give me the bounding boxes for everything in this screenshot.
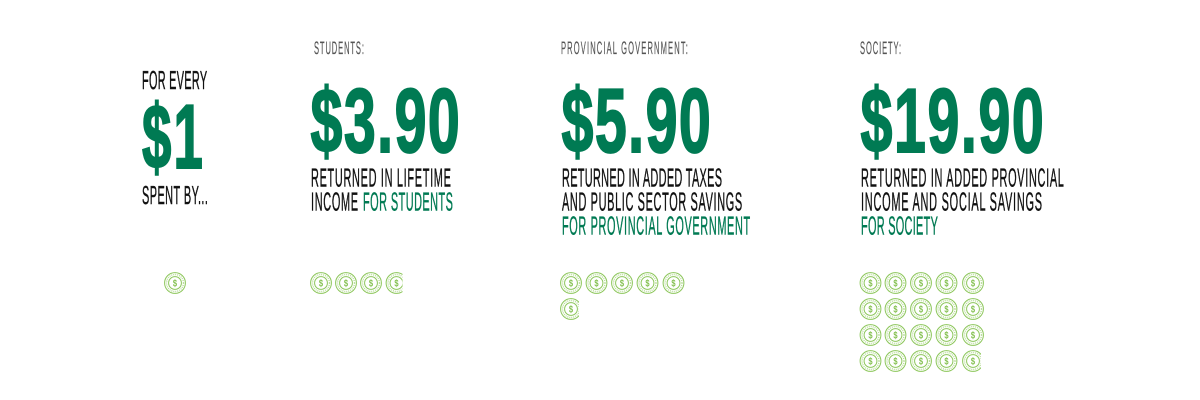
icon row: 3.9 coins	[311, 273, 407, 293]
description: society: INCOME AND SOCIAL SAVINGS	[861, 186, 1042, 216]
icon grid: 19.9 coins: $	[893, 330, 898, 342]
text: for every: FOR EVERY	[142, 65, 207, 95]
icon grid: 19.9 coins: $	[919, 304, 923, 316]
icon grid: 19.9 coins: $	[893, 304, 898, 316]
icon grid: 19.9 coins: $	[944, 356, 949, 368]
icon: single coin	[165, 273, 185, 293]
icon: single coin: $	[173, 278, 177, 290]
icon rows: 5.9 coins: $	[594, 278, 599, 290]
icon grid: 19.9 coins: $	[868, 304, 873, 316]
icon grid: 19.9 coins: $	[868, 356, 873, 368]
icon grid: 19.9 coins: $	[944, 278, 949, 290]
icon rows: 5.9 coins	[561, 273, 684, 319]
icon grid: 19.9 coins: $	[893, 356, 898, 368]
label: provincial government: PROVINCIAL GOVERNMENT:	[561, 38, 688, 58]
icon grid: 19.9 coins: $	[919, 356, 923, 368]
icon grid: 19.9 coins: $	[919, 278, 923, 290]
icon rows: 5.9 coins: $	[569, 278, 573, 290]
description: provincial government: AND PUBLIC SECTOR SAVINGS	[562, 186, 742, 216]
icon row: 3.9 coins: $	[369, 278, 373, 290]
big number: $5.90: $5.90	[562, 71, 711, 172]
icon grid: 19.9 coins: $	[944, 330, 949, 342]
icon rows: 5.9 coins: $	[645, 278, 650, 290]
icon grid: 19.9 coins: $	[971, 304, 975, 316]
icon row: 3.9 coins: $	[319, 278, 323, 290]
icon row: 3.9 coins: $	[394, 278, 399, 290]
label: students: STUDENTS:	[314, 38, 364, 58]
icon grid: 19.9 coins: $	[868, 330, 873, 342]
icon grid: 19.9 coins: $	[971, 356, 975, 368]
big number: $19.90: $19.90	[860, 71, 1044, 172]
panel: for every $1 spent	[142, 65, 208, 293]
description: provincial government: FOR PROVINCIAL GOVERNMENT	[562, 210, 750, 240]
description: society: FOR SOCIETY	[861, 210, 938, 240]
big number: $3.90: $3.90	[310, 71, 460, 172]
icon grid: 19.9 coins: $	[944, 304, 949, 316]
description: provincial government	[562, 162, 750, 240]
icon rows: 5.9 coins: $	[620, 278, 624, 290]
icon grid: 19.9 coins	[860, 273, 983, 371]
description: students: INCOME	[311, 186, 358, 216]
description: society	[861, 162, 1064, 240]
description: students: FOR STUDENTS	[363, 186, 453, 216]
panel: students	[310, 38, 460, 293]
big number: $1: $1	[142, 87, 203, 188]
icon grid: 19.9 coins: $	[893, 278, 898, 290]
description: provincial government: RETURNED IN ADDED TAXES	[562, 162, 722, 192]
description: society: RETURNED IN ADDED PROVINCIAL	[861, 162, 1064, 192]
label: society: SOCIETY:	[860, 38, 901, 58]
panel: society	[860, 38, 1064, 371]
icon grid: 19.9 coins: $	[971, 330, 975, 342]
description: students: RETURNED IN LIFETIME	[311, 162, 451, 192]
icon grid: 19.9 coins: $	[868, 278, 873, 290]
description: students	[311, 162, 453, 216]
text: spent by: SPENT BY...	[142, 180, 208, 210]
icon grid: 19.9 coins: $	[919, 330, 923, 342]
icon rows: 5.9 coins: $	[569, 304, 573, 316]
icon row: 3.9 coins: $	[344, 278, 348, 290]
icon grid: 19.9 coins: $	[971, 278, 975, 290]
icon rows: 5.9 coins: $	[671, 278, 676, 290]
panel: provincial government	[561, 38, 750, 319]
